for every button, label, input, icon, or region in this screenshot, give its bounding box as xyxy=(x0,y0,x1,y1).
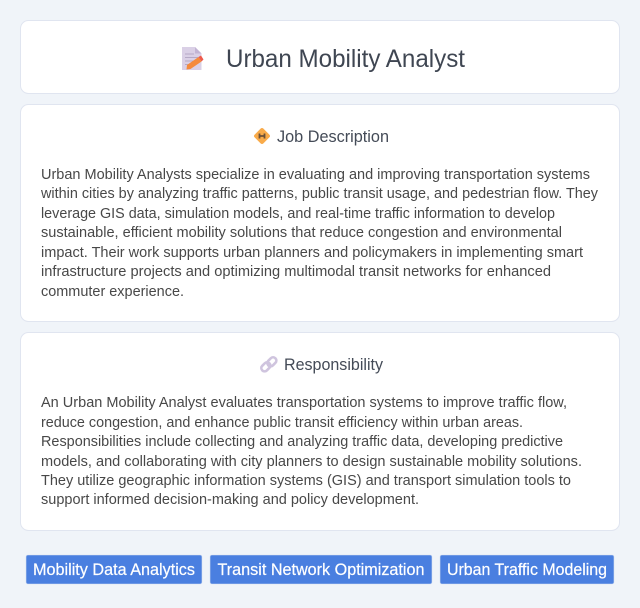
tag: urban traffic modeling xyxy=(440,555,614,584)
tag: mobility data analytics xyxy=(26,555,202,584)
text block: job description: commuter experience. xyxy=(41,284,184,300)
heading: responsibility: Responsibility xyxy=(284,356,384,374)
heading: job description: Job Description xyxy=(277,128,389,146)
text block: responsibility xyxy=(41,395,582,508)
text block: responsibility: An Urban Mobility Analyst evaluates transportation systems to improve traffic flow, xyxy=(41,395,567,411)
text block: responsibility: Responsibilities include collecting and analyzing traffic data, developing predictive xyxy=(41,434,563,450)
text block: responsibility: reduce congestion, and enhance public transit efficiency within urban areas. xyxy=(41,415,523,431)
tag: transit network optimization xyxy=(210,555,432,584)
text block: job description: infrastructure projects and optimizing multimodal transit networks for enhanced xyxy=(41,264,551,280)
text block: responsibility: They utilize geographic information systems (GIS) and transport simulation tools to xyxy=(41,473,571,489)
text block: responsibility: support informed decision-making and policy development. xyxy=(41,492,419,508)
heading: page title: Urban Mobility Analyst xyxy=(226,45,465,73)
tag: urban traffic modeling: Urban Traffic Modeling xyxy=(447,561,607,579)
tag: transit network optimization: Transit Network Optimization xyxy=(218,561,424,579)
tag: mobility data analytics: Mobility Data Analytics xyxy=(33,561,195,579)
panel: job description xyxy=(20,104,620,322)
icon: document with pencil xyxy=(182,47,204,70)
icon: chain link xyxy=(260,356,278,373)
text block: job description: within cities by analyzing traffic patterns, public transit usage, and pedestrian flow. They xyxy=(40,186,599,202)
text block: job description: impact. Their work supports urban planners and policymakers in implementing smart xyxy=(41,245,583,261)
icon: road sign diamond xyxy=(253,127,271,145)
text block: job description: Urban Mobility Analysts specialize in evaluating and improving transportation systems xyxy=(41,167,590,183)
panel: responsibility xyxy=(20,332,620,530)
text block: job description: leverage GIS data, simulation models, and real-time traffic information to develop xyxy=(41,206,555,222)
panel: title xyxy=(20,20,620,94)
text block: job description xyxy=(40,167,599,300)
text block: responsibility: models, and collaborating with city planners to design sustainable mobility solutions. xyxy=(41,454,582,470)
text block: job description: sustainable, efficient mobility solutions that reduce congestion and environmental xyxy=(41,225,562,241)
